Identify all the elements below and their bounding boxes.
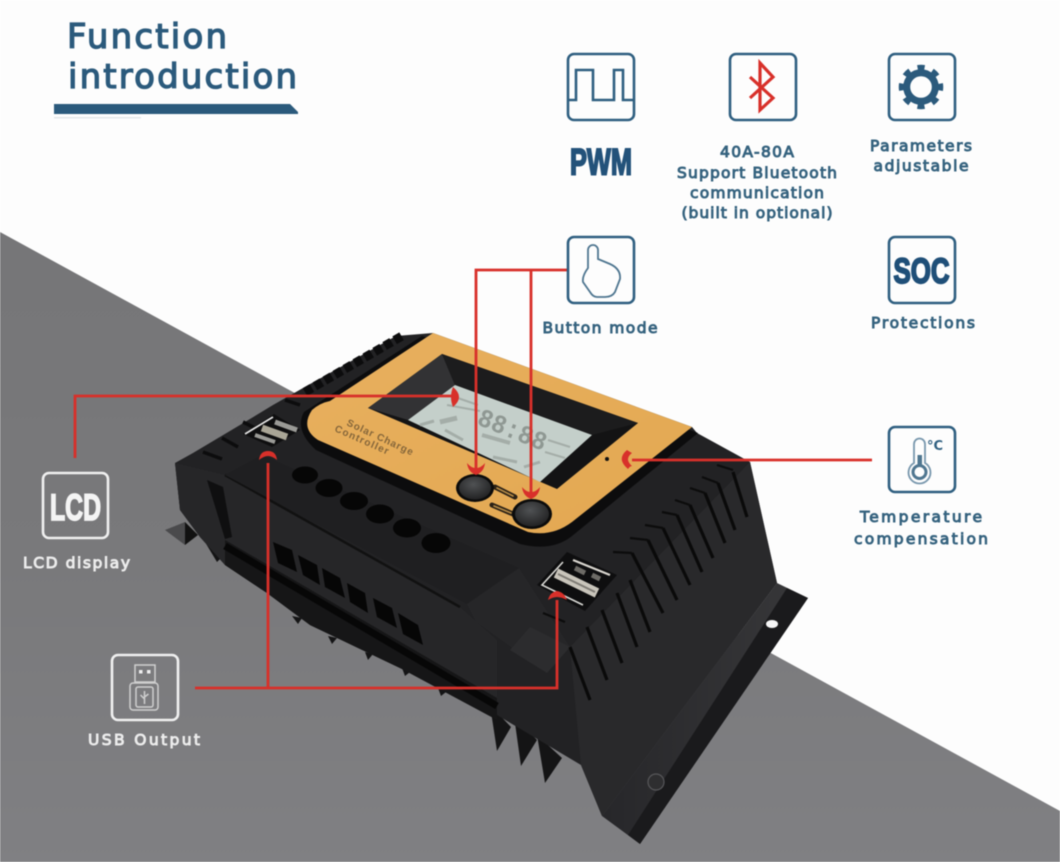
button slots on panel — [492, 487, 515, 514]
label: Temperature compensation: Temperature — [859, 508, 982, 526]
terminal plate with six round holes — [225, 455, 519, 604]
label: Bluetooth support — [677, 143, 837, 222]
device body silhouette — [175, 333, 777, 816]
red callout line: temperature — [622, 450, 872, 469]
product label on panel: Controller — [333, 424, 390, 457]
label: Temperature compensation — [854, 508, 988, 548]
icon: gear — [889, 54, 955, 120]
label: USB Output: USB Output — [88, 731, 200, 749]
left USB port — [243, 414, 300, 447]
solar charge controller device — [165, 333, 808, 844]
icon: SOC — [889, 237, 955, 303]
panel buttons — [456, 474, 552, 529]
label: Bluetooth support: (built in optional) — [682, 204, 832, 222]
top-left ridges — [203, 336, 402, 459]
label: Bluetooth support: communication — [690, 184, 824, 202]
product label on panel: Solar Charge — [345, 418, 415, 458]
front face of body — [175, 463, 497, 715]
label: Parameters adjustable: Parameters — [870, 137, 972, 155]
title: Function introduction: Function — [67, 17, 227, 57]
title: Function introduction — [54, 17, 298, 118]
gold front panel — [307, 333, 692, 533]
bottom heat-sink teeth — [292, 616, 562, 783]
right side face — [570, 462, 777, 816]
red callout lines: USB — [195, 451, 567, 688]
indicator dot — [605, 457, 609, 461]
LCD screen — [408, 385, 592, 482]
label: LCD display: LCD display — [23, 554, 130, 572]
LCD digits and segments: 88:88 — [473, 404, 551, 458]
icon: thermometer: °C — [927, 439, 943, 454]
right heat-sink grooves — [543, 465, 747, 700]
label: Bluetooth support: Support Bluetooth — [677, 164, 837, 182]
label: Parameters adjustable — [870, 137, 972, 175]
right USB port — [537, 552, 617, 611]
terminal block squares — [273, 542, 423, 645]
left mounting bracket tip — [165, 522, 221, 562]
icon: LCD — [43, 473, 108, 538]
terminal ledge — [225, 540, 497, 720]
label: PWM: PWM — [570, 142, 632, 182]
raised corner by right USB — [467, 568, 570, 673]
label: Button mode: Button mode — [542, 319, 658, 337]
label: Bluetooth support: 40A-80A — [720, 143, 794, 161]
icon: thermometer — [889, 427, 955, 492]
red callout lines: buttons — [467, 270, 567, 499]
icon: button hand — [568, 237, 634, 303]
icon: SOC: SOC — [894, 252, 950, 291]
icon: Bluetooth — [730, 54, 796, 120]
LCD bezel — [368, 354, 638, 489]
left front window — [207, 480, 232, 539]
label: Protections: Protections — [871, 314, 975, 332]
title: Function introduction: introduction — [68, 57, 297, 97]
label: Temperature compensation: compensation — [854, 530, 988, 548]
icon: PWM — [568, 54, 634, 120]
icon: USB stick — [112, 655, 178, 720]
top surface edge line — [225, 475, 460, 607]
mounting bracket with holes — [602, 583, 808, 844]
LCD digits and segments — [420, 396, 570, 467]
red callout line: LCD — [75, 387, 459, 458]
gray diagonal background panel — [0, 232, 1060, 862]
icon: LCD: LCD — [50, 487, 101, 528]
black rim around gold panel — [301, 336, 698, 547]
label: Parameters adjustable: adjustable — [874, 157, 968, 175]
